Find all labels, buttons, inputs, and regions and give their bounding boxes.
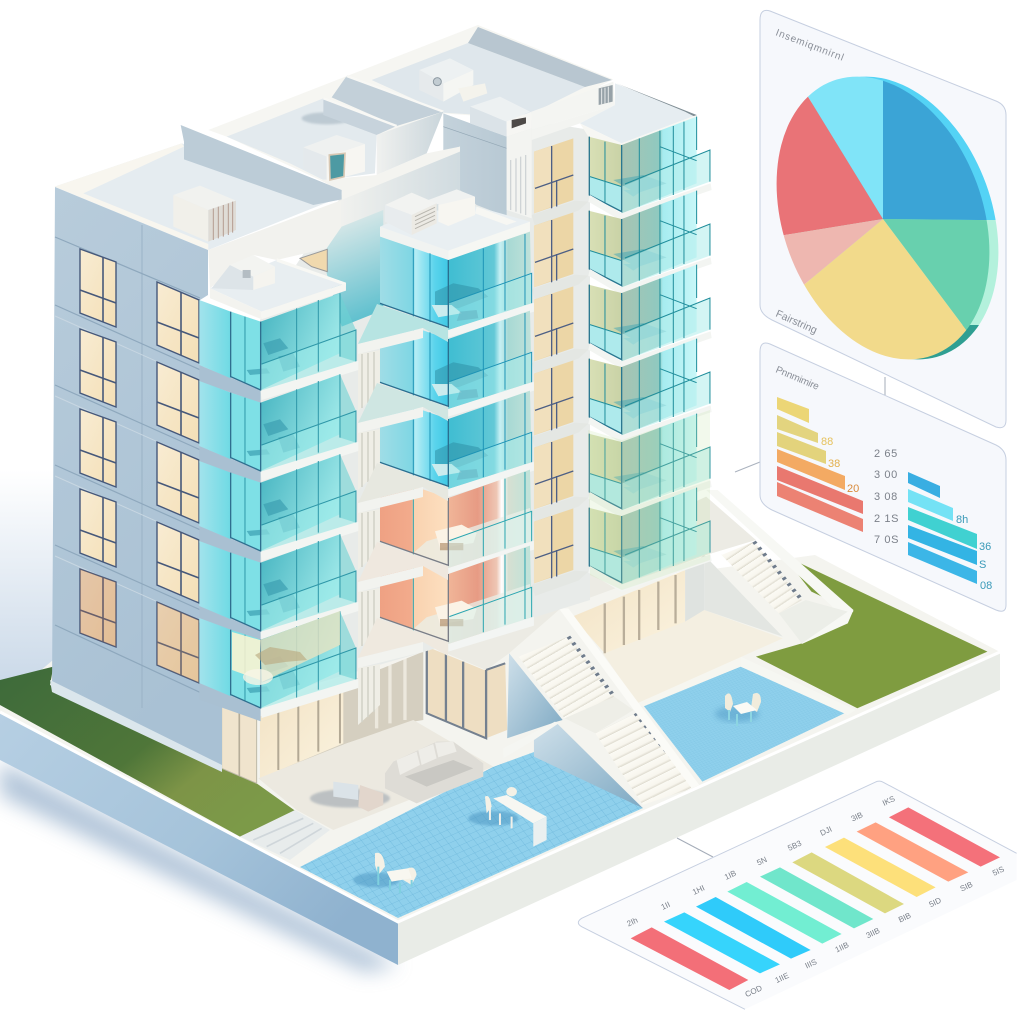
pool: rear [643, 667, 848, 782]
pie side rim [792, 76, 998, 360]
left facade windows [80, 249, 199, 683]
bottom labels: 1IIE [774, 971, 790, 985]
right upper deck [372, 43, 585, 117]
bottom labels [744, 865, 1006, 999]
top parapet [468, 27, 612, 87]
bottom labels: BIB [897, 911, 912, 924]
bottom labels: SIB [959, 880, 974, 893]
small entry stair [240, 810, 330, 860]
roof well [332, 76, 443, 126]
ground shadow under the base [0, 762, 398, 972]
upper deck shadow [302, 112, 352, 124]
box with slot [470, 97, 532, 137]
left facade [50, 187, 232, 772]
sofa [385, 742, 483, 803]
warm bars [777, 397, 863, 532]
warm bar values [821, 436, 859, 495]
ground floor glazing [260, 685, 343, 778]
top labels: 5B3 [786, 838, 804, 853]
panel: lower bar chart [578, 781, 1017, 1009]
bottom labels: IIIS [804, 957, 818, 970]
wall below ledge [342, 152, 475, 247]
bottom labels: 5ID [928, 896, 943, 909]
core wall [443, 113, 507, 217]
top labels: IKS [881, 794, 896, 808]
rooftop AC with door [303, 135, 365, 182]
ribbed pilaster [507, 128, 532, 218]
top labels: 2Ih [625, 916, 639, 928]
connector line: pie to bars [884, 377, 886, 409]
right tower roof [580, 83, 697, 147]
panel: bar charts [760, 343, 1006, 611]
white return wall [208, 200, 342, 288]
panel title: Insemiqmnirnl [774, 28, 845, 64]
roof AC with fan [419, 58, 487, 102]
top labels: DJI [819, 825, 833, 838]
cool bar values: S [979, 559, 986, 571]
rear courtyard glazing [572, 570, 685, 653]
parapet face [181, 125, 342, 205]
centre values [874, 448, 899, 546]
top labels: 1II [660, 900, 672, 912]
bottom labels: 1IIB [834, 940, 850, 954]
connector line: base to lower chart [677, 838, 713, 857]
centre values: 3 08 [874, 491, 898, 503]
panel: pie chart [760, 10, 1006, 428]
bars [631, 807, 1000, 990]
upper roof structures [208, 25, 613, 247]
stair rail [559, 608, 699, 788]
cool bars [908, 472, 977, 584]
terrace AC [212, 255, 275, 290]
left upper deck [227, 98, 377, 180]
AC unit right [428, 189, 475, 226]
right tower balconies [588, 117, 712, 592]
building mass behind [260, 120, 590, 700]
cool bar values [956, 514, 992, 592]
wedge wall lower [534, 723, 643, 808]
lower stair landing [565, 697, 633, 733]
middle tower terrace [380, 189, 530, 260]
panel heading: Pnnmimire [774, 365, 821, 393]
top labels: 3IB [850, 810, 864, 823]
upper stair [721, 542, 802, 613]
left tower balconies [199, 293, 358, 721]
upper terrace plate [392, 497, 756, 670]
yellow window column [532, 138, 588, 596]
curtains in the recess between towers [358, 350, 380, 725]
pool: front [300, 752, 643, 918]
beige peek window [300, 249, 327, 272]
site base [0, 555, 1000, 965]
middle tower balconies [380, 232, 534, 652]
patio floor [258, 720, 493, 830]
lawn: left [0, 667, 295, 837]
bottom labels: 3IIB [865, 926, 881, 940]
centre values: 3 00 [874, 469, 898, 481]
ground floor [222, 645, 547, 893]
connector line: building to bar panel [735, 462, 760, 472]
roof deck [55, 143, 342, 250]
top labels: 1HI [691, 883, 706, 897]
lower courtyard floor [603, 610, 783, 703]
warm bar values: 88 [821, 436, 833, 448]
chairs on the front pool [353, 853, 417, 893]
centre values: 2 1S [874, 513, 899, 525]
main roof with parapet [55, 125, 383, 327]
upper stair rail [706, 490, 853, 644]
slab above ground floor [260, 645, 423, 717]
terrace roof [210, 260, 346, 312]
pie caption: Fairstring [774, 308, 819, 337]
rear wedge wall [704, 555, 783, 637]
ground glazing right [427, 647, 507, 738]
top labels: 1IB [723, 869, 738, 882]
warm bar values: 20 [847, 483, 859, 495]
entrance glass door [222, 703, 257, 783]
terraces, stairs and rear pool [392, 490, 987, 808]
wedge wall upper [507, 653, 563, 738]
bottom labels: 5IS [991, 865, 1006, 878]
retaining slab [503, 722, 559, 758]
centre values: 2 65 [874, 448, 898, 460]
warm tint on the lowest windows [80, 569, 199, 683]
table on the front pool [468, 787, 547, 847]
roof rim [208, 25, 613, 180]
parapet vent wall [532, 82, 615, 130]
cool bar values: 08 [980, 580, 992, 592]
rooftop AC large [173, 186, 236, 242]
wall behind the right tower roof [532, 105, 615, 140]
thin roof wall [323, 98, 397, 135]
shaded recess wall [327, 210, 383, 327]
cool bar values: 36 [979, 541, 991, 553]
white ledge [320, 147, 460, 200]
warm lounge on lowest left balcony [232, 611, 340, 685]
chairs on the rear pool [715, 693, 761, 726]
backdrop shadow left of the building [0, 470, 55, 690]
recess back wall [260, 647, 423, 778]
sofa shadow [310, 789, 390, 808]
lawn: right [756, 555, 987, 708]
warm bar values: 38 [828, 458, 840, 470]
lower stair: bottom flight [595, 713, 697, 805]
green tint on lower right balconies [588, 410, 710, 590]
top labels: 5N [755, 855, 769, 867]
bottom labels: COD [744, 983, 764, 999]
ottoman pair [333, 782, 383, 812]
centre values: 7 0S [874, 534, 899, 546]
top labels [625, 794, 896, 928]
pie chart [776, 76, 990, 360]
parapet vent [599, 85, 613, 105]
AC unit left with louvres [385, 193, 437, 235]
lower stair: upper flight [519, 637, 614, 718]
wedge wall [377, 112, 443, 175]
floor plates in the recess [358, 304, 448, 668]
cool bar values: 8h [956, 514, 968, 526]
